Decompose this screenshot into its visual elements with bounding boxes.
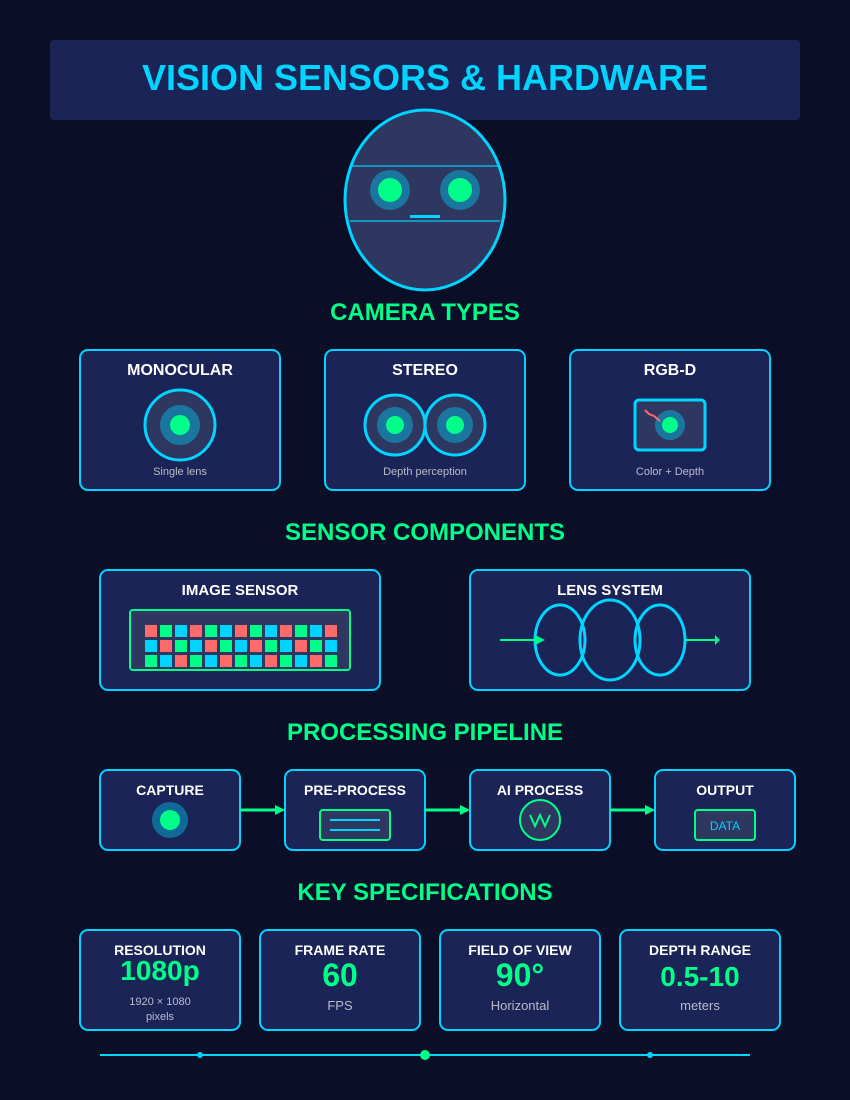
panel: rgb-d: Color + Depth	[636, 466, 704, 478]
spec: resolution: 1920 × 1080	[129, 996, 191, 1008]
panel: monocular	[80, 350, 280, 490]
panel: lens system	[470, 570, 750, 690]
spec: frame rate: FPS	[327, 998, 353, 1013]
heading: camera types: CAMERA TYPES	[330, 299, 520, 326]
arrow: pre-process to ai process	[425, 805, 470, 815]
panel: rgb-d: RGB-D	[644, 362, 696, 379]
spec: resolution	[80, 930, 240, 1030]
heading: sensor components: SENSOR COMPONENTS	[285, 519, 565, 546]
spec: field of view: Horizontal	[491, 998, 549, 1013]
spec: field of view	[440, 930, 600, 1030]
title banner: VISION SENSORS & HARDWARE	[142, 57, 708, 98]
spec: resolution: pixels	[146, 1011, 175, 1023]
panel: lens system: LENS SYSTEM	[557, 582, 663, 599]
title banner	[50, 40, 800, 120]
step: capture: CAPTURE	[136, 782, 204, 798]
panel: rgb-d	[570, 350, 770, 490]
heading: processing pipeline: PROCESSING PIPELINE	[287, 719, 563, 746]
icon: robot head	[345, 110, 505, 290]
step: pre-process	[285, 770, 425, 850]
panel: monocular: Single lens	[153, 466, 207, 478]
step: pre-process: PRE-PROCESS	[304, 782, 406, 798]
spec: field of view: 90°	[496, 957, 544, 993]
panel: stereo: Depth perception	[383, 466, 467, 478]
footer timeline	[100, 1050, 750, 1060]
spec: resolution: 1080p	[120, 955, 200, 986]
spec: depth range: meters	[680, 998, 720, 1013]
step: output: OUTPUT	[696, 782, 754, 798]
step: ai process	[470, 770, 610, 850]
arrow: capture to pre-process	[240, 805, 285, 815]
panel: monocular: MONOCULAR	[127, 362, 233, 379]
panel: stereo: STEREO	[392, 362, 458, 379]
spec: field of view: FIELD OF VIEW	[468, 942, 573, 958]
step: ai process: AI PROCESS	[497, 782, 583, 798]
panel: image sensor: IMAGE SENSOR	[182, 582, 299, 599]
step: capture	[100, 770, 240, 850]
panel: image sensor	[100, 570, 380, 690]
spec: frame rate	[260, 930, 420, 1030]
step: output	[655, 770, 795, 850]
spec: resolution: RESOLUTION	[114, 942, 206, 958]
heading: key specifications: KEY SPECIFICATIONS	[297, 879, 553, 906]
spec: depth range	[620, 930, 780, 1030]
spec: depth range: 0.5-10	[660, 961, 740, 992]
spec: frame rate: FRAME RATE	[295, 942, 385, 958]
panel: stereo	[325, 350, 525, 490]
arrow: ai process to output	[610, 805, 655, 815]
spec: depth range: DEPTH RANGE	[649, 942, 751, 958]
spec: frame rate: 60	[322, 957, 358, 993]
step: output: DATA	[710, 819, 740, 833]
